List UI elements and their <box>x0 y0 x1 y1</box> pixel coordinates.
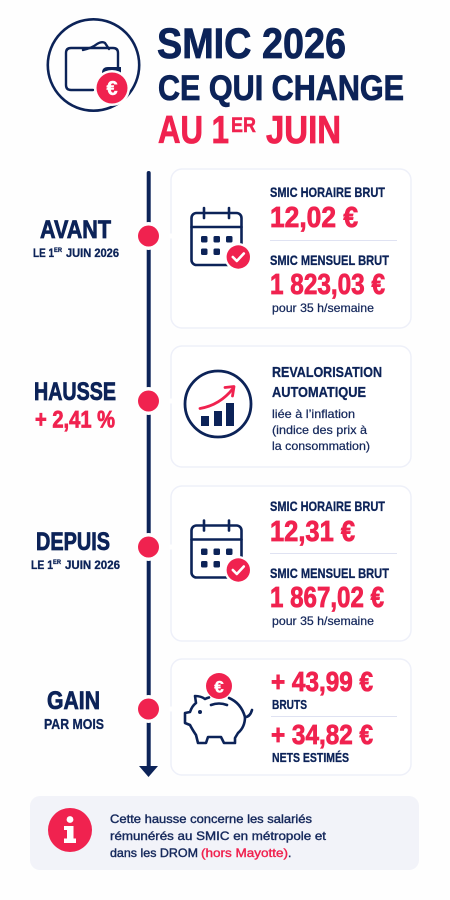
text: hours: pour 35 h/semaine <box>272 301 374 315</box>
text: hourly after: SMIC HORAIRE BRUT <box>270 498 385 514</box>
marker: depuis <box>134 533 174 561</box>
callout: information <box>30 796 419 870</box>
text: gross: BRUTS <box>272 698 307 712</box>
panel: hausse: (indice des prix à <box>272 423 367 437</box>
text: hours: pour 35 h/semaine <box>272 614 374 628</box>
marker: gain <box>134 695 174 723</box>
label: gain <box>44 687 104 733</box>
value: hourly before: 12,02 € <box>270 202 358 234</box>
callout: information: . <box>288 846 291 860</box>
title: CE QUI CHANGE <box>158 69 404 108</box>
text: net: NETS ESTIMÉS <box>272 750 349 765</box>
marker: avant <box>134 222 174 250</box>
label: depuis: JUIN 2026 <box>65 560 120 572</box>
marker: hausse <box>134 387 174 415</box>
callout: information: rémunérés au SMIC en métropole et <box>110 829 327 843</box>
panel: avant <box>171 169 411 328</box>
panel: hausse: AUTOMATIQUE <box>272 384 366 401</box>
callout: information: (hors Mayotte) <box>201 846 288 860</box>
label: hausse: + 2,41 % <box>35 406 115 434</box>
icon: piggy bank with euro coin <box>185 673 252 743</box>
panel: hausse: la consommation) <box>272 439 370 453</box>
label: depuis <box>31 528 120 572</box>
label: gain: GAIN <box>47 687 100 715</box>
title: AU 1 <box>158 109 229 152</box>
value: monthly before: 1 823,03 € <box>270 269 385 301</box>
text: hourly before: SMIC HORAIRE BRUT <box>270 184 385 200</box>
label: gain: PAR MOIS <box>44 717 104 733</box>
title <box>157 20 404 152</box>
label: avant: LE 1 <box>33 248 55 260</box>
icon: calendar <box>192 520 252 584</box>
timeline line with arrow <box>139 171 158 777</box>
title: JUIN <box>266 109 341 152</box>
value: gross gain: + 43,99 € <box>271 666 373 697</box>
text: monthly before: SMIC MENSUEL BRUT <box>270 252 389 268</box>
icon: calendar <box>192 208 252 271</box>
text: monthly after: SMIC MENSUEL BRUT <box>270 565 389 581</box>
label: hausse <box>34 378 116 434</box>
icon: info <box>48 808 92 852</box>
label: avant: AVANT <box>40 216 111 244</box>
panel: gain <box>171 659 411 775</box>
value: monthly after: 1 867,02 € <box>270 582 384 614</box>
value: net gain: + 34,82 € <box>271 719 373 750</box>
label: depuis: DEPUIS <box>36 528 110 556</box>
label: depuis: LE 1 <box>31 560 54 572</box>
panel: hausse <box>171 346 411 467</box>
title: SMIC 2026 <box>157 20 346 68</box>
icon: rising chart <box>185 371 251 437</box>
value: hourly after: 12,31 € <box>270 516 355 548</box>
icon: piggy bank with euro coin: € <box>214 678 224 696</box>
text: inflation: liée à l’inflation <box>272 407 355 421</box>
title: ER <box>231 114 256 137</box>
label: hausse: HAUSSE <box>34 378 116 406</box>
heading: revalorisation: REVALORISATION <box>272 364 382 381</box>
label: avant: JUIN 2026 <box>66 248 119 260</box>
label: depuis: ER <box>53 559 61 566</box>
panel: depuis <box>171 486 411 641</box>
icon: wallet with euro coin: € <box>106 78 118 100</box>
callout: information: dans les DROM <box>110 846 198 860</box>
text: note: Cette hausse concerne les salariés <box>110 812 312 826</box>
icon: wallet with euro coin <box>48 19 139 111</box>
label: avant <box>33 216 119 260</box>
label: avant: ER <box>54 247 62 254</box>
